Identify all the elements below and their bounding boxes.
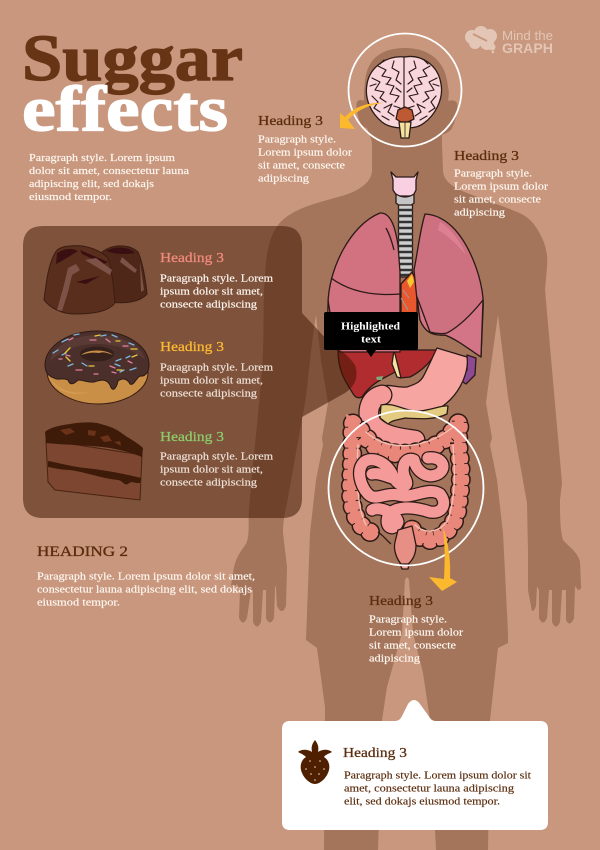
organ: stomach <box>378 348 467 417</box>
callout: gut heading: adipiscing <box>369 654 420 664</box>
callout: brain heading: Heading 3 <box>258 113 323 128</box>
callout: brain heading: Lorem ipsum dolor <box>258 148 353 158</box>
callout: highlighted text: Highlighted <box>341 320 400 332</box>
callout: brain heading: sit amet, consecte <box>258 160 345 172</box>
organs: lungs <box>328 213 483 357</box>
organ: duodenum <box>369 395 415 440</box>
text: sweet 2: Heading 3 <box>160 339 224 354</box>
heading 2 block: eiusmod tempor. <box>37 598 120 608</box>
card: strawberry callout: amet, consectetur launa adipiscing <box>344 784 514 794</box>
organ: liver <box>338 350 437 398</box>
title: effects <box>22 74 228 146</box>
arrow: brain <box>340 103 383 129</box>
intro paragraph: Paragraph style. Lorem ipsum <box>29 153 175 164</box>
callout: upper right heading: adipiscing <box>454 208 505 218</box>
icon: strawberry <box>298 740 332 784</box>
organ: colon <box>351 420 461 540</box>
icon: brain <box>366 56 442 138</box>
text: sweet 2: consecte adipiscing <box>160 388 257 400</box>
text: sweet 3 <box>160 429 273 488</box>
organ: rectum <box>378 526 416 569</box>
text: sweet 1: Heading 3 <box>160 250 224 265</box>
intro paragraph: eiusmod tempor. <box>29 192 112 203</box>
organ: pancreas <box>380 404 448 424</box>
icon: bonbons <box>44 246 147 314</box>
card: strawberry callout: elit, sed dokajs eiusmod tempor. <box>344 796 500 808</box>
text: sweet 2: ipsum dolor sit amet, <box>160 376 263 386</box>
text: sweet 2: Paragraph style. Lorem <box>160 362 273 374</box>
title: Suggar <box>22 22 243 95</box>
callout: brain heading: Paragraph style. <box>258 134 336 146</box>
body silhouette <box>231 48 581 850</box>
organ: small intestine <box>360 458 444 528</box>
text: sweet 1: consecte adipiscing <box>160 300 257 310</box>
icon: cake <box>45 422 143 500</box>
intro paragraph: dolor sit amet, consectetur launa <box>29 166 189 177</box>
arrow: gut <box>429 528 457 591</box>
logo: Mind the <box>502 29 553 43</box>
callout: upper right heading: sit amet, consecte <box>454 194 541 206</box>
title <box>22 22 243 146</box>
intro paragraph <box>29 153 189 203</box>
card: strawberry callout <box>282 700 548 830</box>
callout: gut heading: sit amet, consecte <box>369 640 456 652</box>
text: sweet 1: Paragraph style. Lorem <box>160 274 273 284</box>
text: sweet 1 <box>160 250 273 310</box>
callout: brain heading <box>258 113 353 184</box>
callout: upper right heading: Lorem ipsum dolor <box>454 182 549 192</box>
circle: brain highlight <box>348 34 462 146</box>
text: sweet 1: ipsum dolor sit amet, <box>160 286 263 298</box>
callout: upper right heading <box>454 148 549 218</box>
text: sweet 3: consecte adipiscing <box>160 478 257 488</box>
heading 2 block <box>37 544 255 608</box>
organs: trachea and larynx <box>391 172 418 277</box>
icon: donut <box>45 331 149 404</box>
text: sweet 3: Heading 3 <box>160 429 224 444</box>
panel: sweets <box>23 226 357 518</box>
heading 2 block: consectetur launa adipiscing elit, sed dokajs <box>37 584 252 596</box>
callout: highlighted text: text <box>361 334 381 346</box>
card: strawberry callout: Heading 3 <box>343 745 407 760</box>
circle: gut highlight <box>328 410 484 566</box>
heading 2 block: Paragraph style. Lorem ipsum dolor sit amet, <box>37 572 255 582</box>
callout: upper right heading: Paragraph style. <box>454 168 532 180</box>
callout: highlighted text <box>324 312 418 357</box>
text: sweet 3: Paragraph style. Lorem <box>160 452 273 462</box>
logo: GRAPH <box>502 40 553 56</box>
text: sweet 2 <box>160 339 273 400</box>
intro paragraph: adipiscing elit, sed dokajs <box>29 179 154 190</box>
callout: brain heading: adipiscing <box>258 174 309 184</box>
callout: upper right heading: Heading 3 <box>454 148 519 163</box>
callout: gut heading: Paragraph style. <box>369 614 447 626</box>
callout: gut heading: Lorem ipsum dolor <box>369 628 464 638</box>
card: strawberry callout: Paragraph style. Lorem ipsum dolor sit <box>344 770 531 782</box>
heading 2 block: HEADING 2 <box>37 544 128 560</box>
organ: heart <box>401 272 417 314</box>
text: sweet 3: ipsum dolor sit amet, <box>160 464 263 476</box>
callout: gut heading: Heading 3 <box>369 593 433 608</box>
callout: gut heading <box>369 593 464 664</box>
organ: spleen <box>460 355 476 384</box>
logo <box>465 26 553 56</box>
